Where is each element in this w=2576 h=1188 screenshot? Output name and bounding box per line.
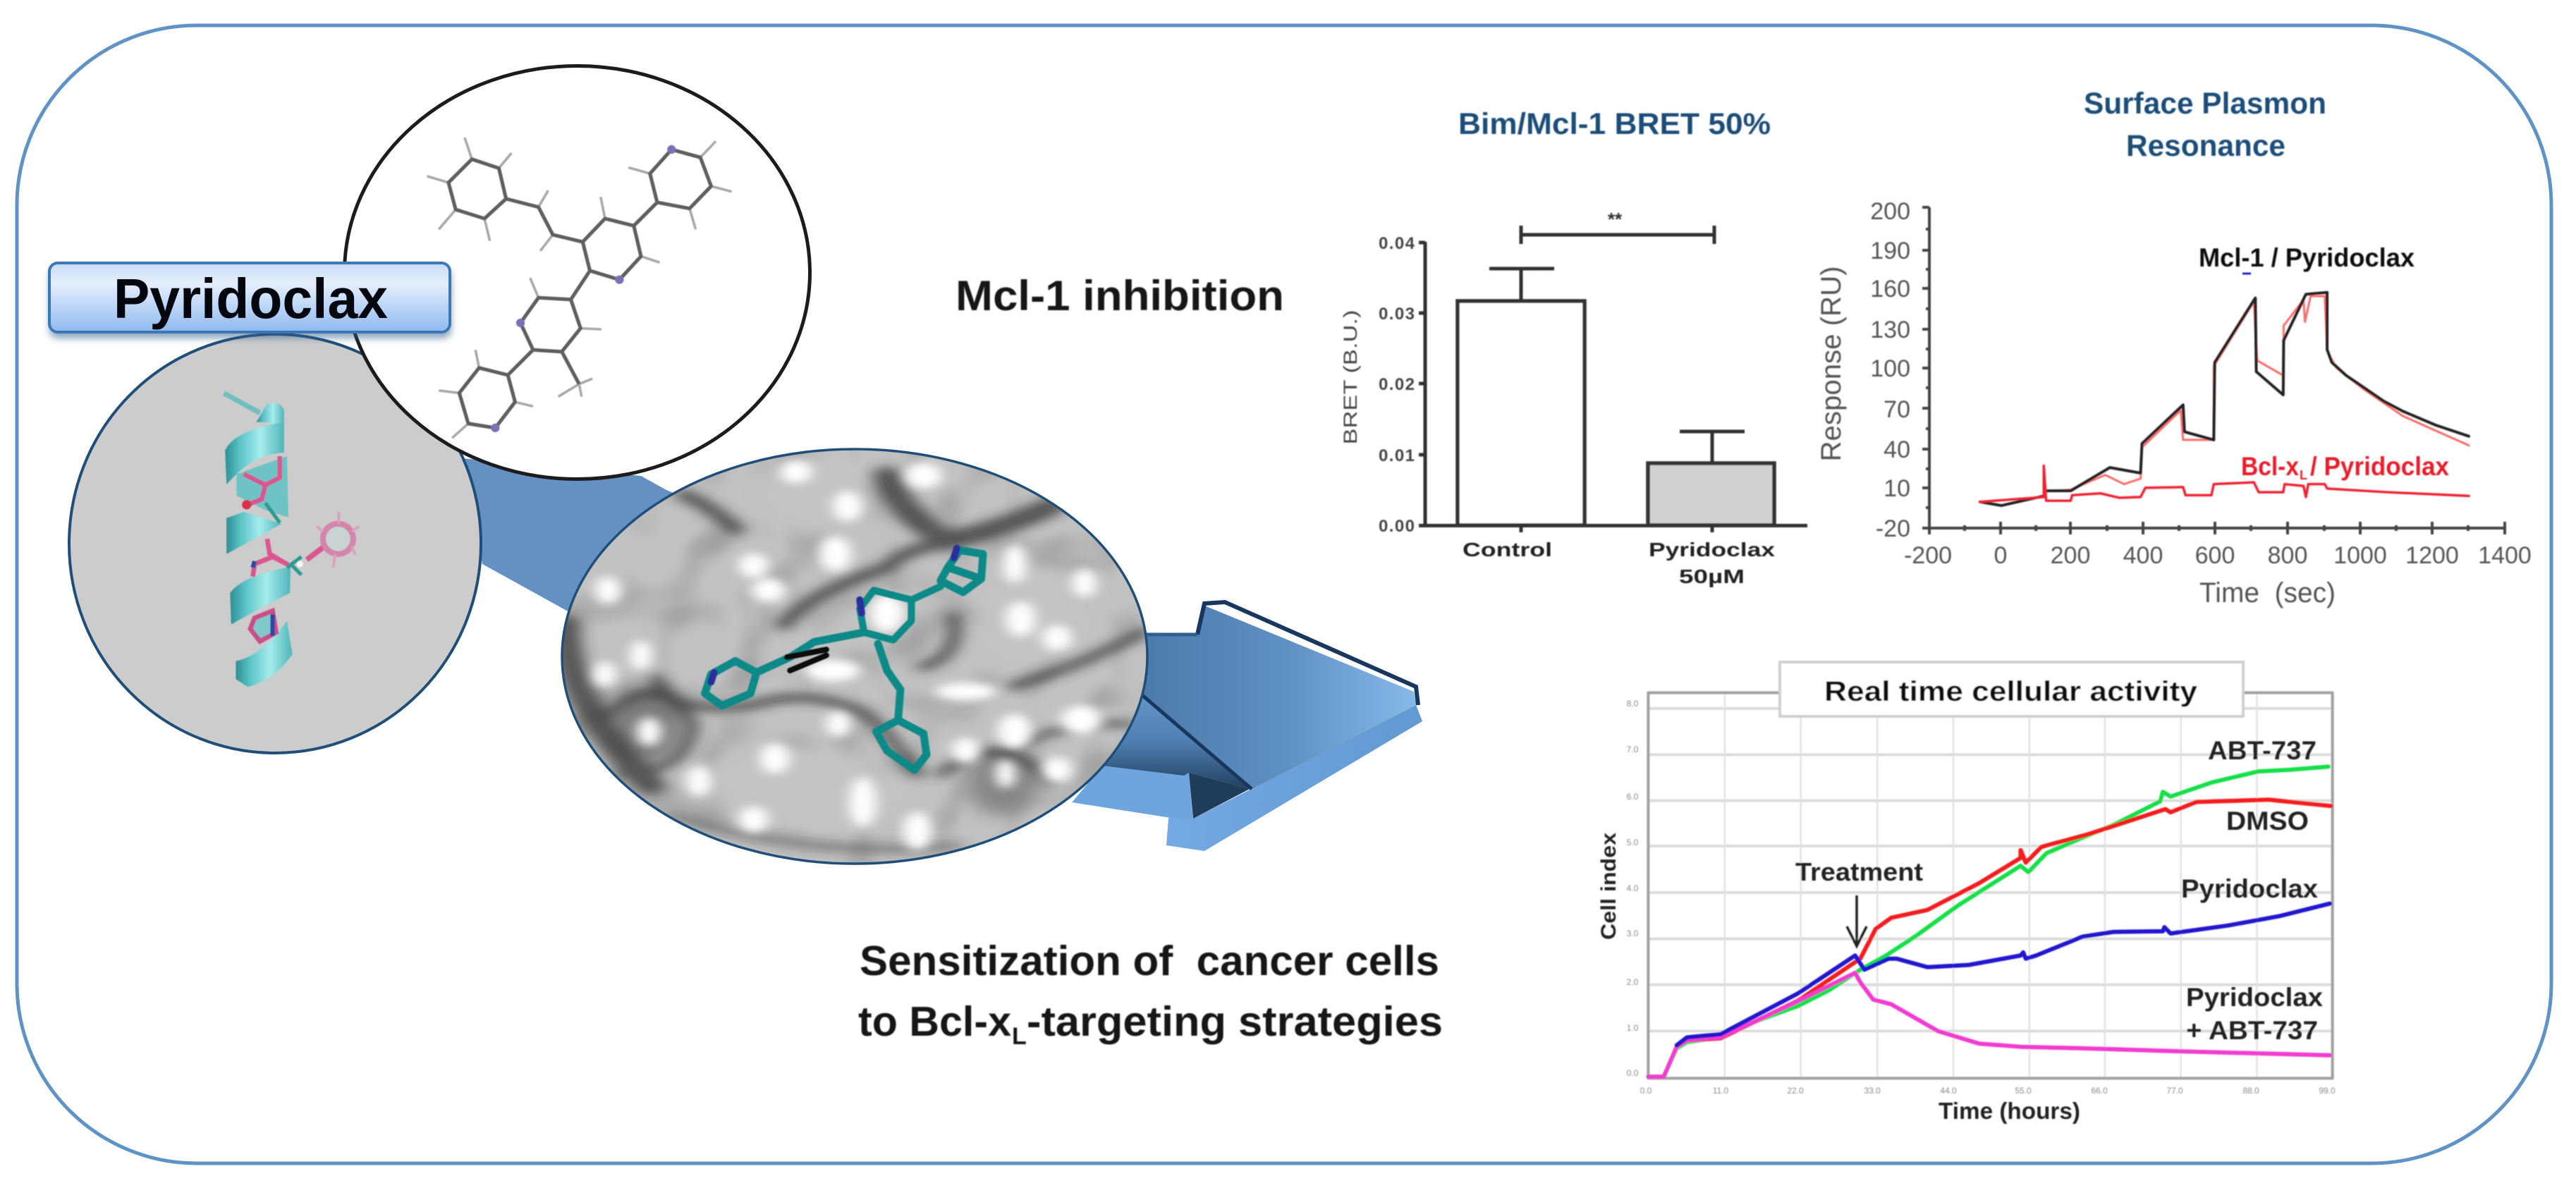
surface outline (562, 449, 1147, 864)
cell index tick labels: 8.0 (1627, 699, 1639, 709)
SPR axis labels: Response (RU) (1816, 267, 1847, 461)
compound name label: Pyridoclax (49, 263, 451, 338)
arrow head inner shadow (1189, 773, 1250, 819)
SPR y tick labels: 130 (1870, 317, 1910, 343)
significance bracket: ** (1608, 209, 1623, 230)
SPR x tick labels: 1400 (2478, 542, 2532, 569)
BRET chart title: Bim/Mcl-1 BRET 50% (1458, 107, 1771, 141)
cell index tick labels: 99.0 (2319, 1086, 2336, 1096)
SPR x tick labels: 200 (2051, 542, 2090, 569)
cell index tick labels: 3.0 (1627, 929, 1639, 938)
arrow head top face (1128, 606, 1416, 789)
control bar (1458, 301, 1585, 525)
error bars (1489, 269, 1745, 463)
SPR x tick labels (1904, 542, 2532, 569)
surface shading grooves (566, 476, 1142, 849)
cell index grid (1648, 692, 2333, 1078)
cell index tick labels: 5.0 (1627, 838, 1639, 847)
cell index chart title box: Real time cellular activity (1824, 676, 2198, 707)
BRET category labels: Pyridoclax (1649, 539, 1776, 561)
SPR series labels (2199, 243, 2449, 482)
SPR y tick labels: 200 (1870, 198, 1910, 225)
SPR series labels: Mcl-1 / Pyridoclax (2199, 243, 2415, 272)
heading: sensitization: to Bcl-x (858, 998, 1011, 1045)
SPR x tick labels: -200 (1904, 542, 1952, 569)
cell index tick labels: 1.0 (1627, 1023, 1639, 1033)
BRET tick labels: 0.03 (1379, 305, 1415, 324)
SPR x tick labels: 400 (2123, 542, 2163, 569)
cell index chart title box (1780, 662, 2243, 716)
cell index tick labels: 2.0 (1627, 977, 1639, 987)
cell index series labels: DMSO (2226, 807, 2309, 835)
treatment annotation arrow (1795, 857, 1923, 946)
SPR y tick labels: 190 (1870, 238, 1910, 264)
cell index series labels: Pyridoclax (2186, 983, 2323, 1012)
circle: helix peptide (69, 334, 481, 753)
BRET category labels: Control (1463, 539, 1552, 561)
chart: surface plasmon resonance (1816, 87, 2532, 608)
cell index tick labels: 77.0 (2166, 1086, 2183, 1096)
cell index tick labels: 0.0 (1627, 1068, 1639, 1078)
cell index curves (1648, 766, 2328, 1077)
ball and stick molecule (427, 137, 732, 438)
BRET tick labels: 0.00 (1379, 517, 1415, 536)
compound name label: Pyridoclax: Pyridoclax (114, 267, 388, 330)
arrow head rim (1166, 705, 1422, 851)
arrow shaft lower light band (1072, 765, 1193, 821)
pyridoclax bar (1648, 463, 1774, 525)
BRET tick labels: 0.02 (1379, 375, 1415, 394)
heading: sensitization: -targeting strategies (1027, 998, 1443, 1045)
SPR x tick labels: 600 (2195, 542, 2235, 569)
SPR x tick labels: 800 (2268, 542, 2307, 569)
SPR axis labels: Time (sec) (2199, 577, 2336, 608)
cell index axis labels: Time (hours) (1939, 1098, 2080, 1124)
cell index series labels: Pyridoclax (2181, 874, 2318, 903)
SPR series labels: Bcl-x (2241, 452, 2299, 481)
BRET y axis label: BRET (B.U.) (1340, 310, 1361, 444)
BRET category labels: 50µM (1679, 565, 1745, 587)
BRET tick labels (1379, 234, 1415, 536)
arrow head dark edge (1197, 602, 1418, 705)
SPR chart title: Surface Plasmon (2084, 87, 2326, 121)
cell index axis labels: Cell index (1597, 833, 1620, 940)
SPR series labels: / Pyridoclax (2310, 452, 2449, 481)
SPR axis labels (1816, 267, 2336, 608)
cell index tick labels: 0.0 (1640, 1086, 1652, 1096)
cell index tick labels: 22.0 (1787, 1086, 1804, 1096)
BRET axes (1419, 242, 1807, 532)
treatment annotation arrow: Treatment (1795, 857, 1923, 886)
SPR y tick labels: 40 (1884, 436, 1910, 463)
SPR chart title: Resonance (2126, 129, 2285, 163)
SPR y tick labels: 10 (1884, 475, 1910, 502)
arrow shaft upper band (462, 458, 776, 670)
cell index tick labels: 88.0 (2242, 1086, 2259, 1096)
heading: sensitization: L (1012, 1023, 1027, 1050)
helix ribbon (224, 393, 359, 687)
cell index tick labels: 33.0 (1864, 1086, 1881, 1096)
heading: sensitization: Sensitization of cancer cells (860, 938, 1439, 984)
SPR y tick labels: 100 (1870, 355, 1910, 382)
cell index tick labels: 55.0 (2015, 1086, 2032, 1096)
cell index tick labels: 44.0 (1940, 1086, 1957, 1096)
surface lobes (611, 453, 1087, 835)
cell index tick labels: 6.0 (1627, 792, 1639, 802)
surface highlights (594, 460, 1102, 850)
SPR sensorgram curves (1980, 293, 2469, 506)
cell index series labels (2181, 736, 2323, 1045)
SPR chart title (2084, 87, 2326, 163)
cell index tick labels: 66.0 (2091, 1086, 2108, 1096)
SPR axes (1922, 207, 2505, 534)
cell index series labels: + ABT-737 (2186, 1016, 2318, 1045)
BRET tick labels: 0.01 (1379, 446, 1415, 465)
3D blue arrow (462, 458, 1422, 851)
SPR x tick labels: 0 (1994, 542, 2007, 569)
chart: real time cellular activity (1597, 662, 2336, 1124)
chart: BRET bar chart (1340, 107, 1807, 587)
heading: Mcl-1 inhibition: Mcl-1 inhibition (956, 272, 1284, 319)
BRET category labels (1463, 539, 1776, 587)
cell index tick labels: 7.0 (1627, 745, 1639, 754)
cell index tick labels: 4.0 (1627, 883, 1639, 893)
SPR series labels: L (2300, 468, 2307, 482)
SPR y tick labels (1870, 198, 1910, 542)
helix side chains (244, 456, 287, 577)
SPR x tick labels: 1200 (2405, 542, 2459, 569)
significance bracket (1521, 209, 1714, 244)
circle: pyridoclax chemical structure (344, 66, 810, 479)
SPR x tick labels: 1000 (2333, 542, 2387, 569)
docked teal ligand (705, 549, 983, 770)
SPR y tick labels: 160 (1870, 276, 1910, 302)
cell index tick labels (1627, 699, 2336, 1096)
cell index series labels: ABT-737 (2208, 736, 2316, 765)
SPR y tick labels: -20 (1876, 515, 1910, 542)
surface relief (557, 444, 1156, 867)
cell index tick labels: 11.0 (1713, 1086, 1729, 1096)
cell index axis labels (1597, 833, 2080, 1124)
BRET tick labels: 0.04 (1379, 234, 1415, 253)
heading: sensitization (858, 938, 1443, 1050)
SPR y tick labels: 70 (1884, 396, 1910, 423)
circle: protein surface with docked ligand (557, 444, 1156, 867)
arrow shaft dark side (1097, 683, 1250, 789)
